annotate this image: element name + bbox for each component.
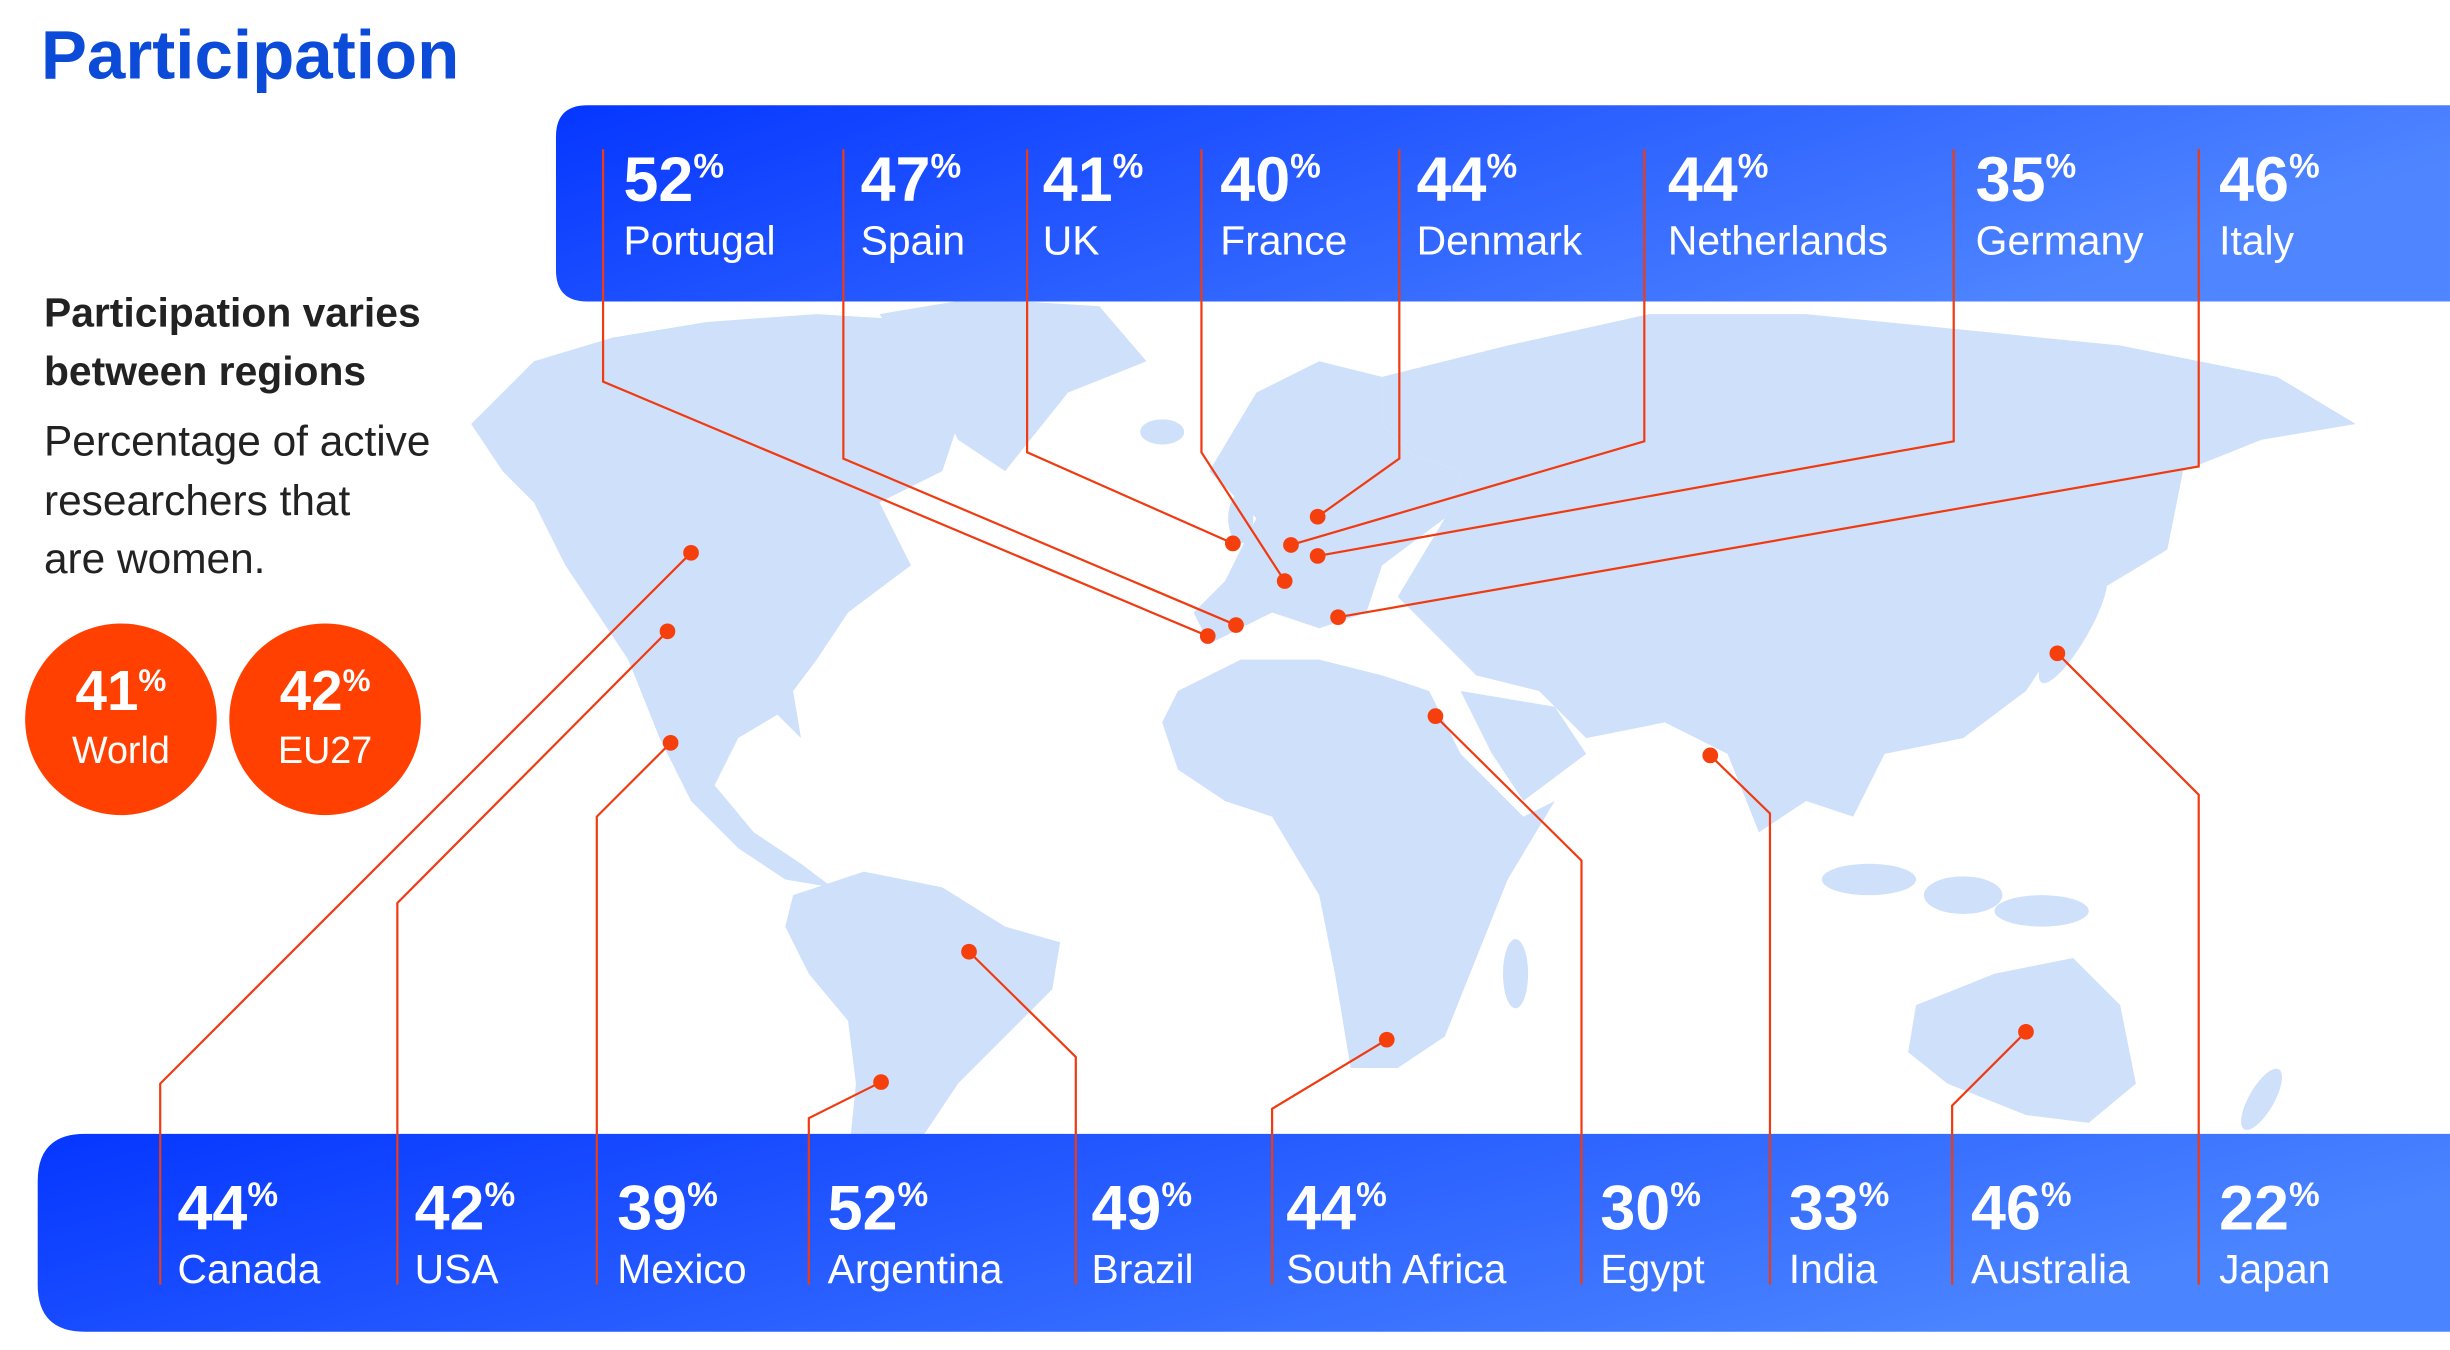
circle: World xyxy=(25,623,217,815)
top bar panel: Denmark xyxy=(1417,217,1583,263)
circle: World: World xyxy=(72,729,170,771)
bottom bar panel: India xyxy=(1789,1246,1878,1292)
bottom bar panel: 42 xyxy=(415,1174,484,1244)
top bar panel: Portugal xyxy=(623,217,776,263)
top bar panel: % xyxy=(1486,147,1517,185)
bottom bar panel: Brazil xyxy=(1092,1246,1194,1292)
top bar panel: 52 xyxy=(623,145,693,215)
bottom bar panel: 44 xyxy=(1286,1174,1356,1244)
circle: EU27: % xyxy=(343,663,371,698)
bottom bar panel: % xyxy=(1670,1176,1701,1214)
title: Participation xyxy=(41,16,459,94)
circle: EU27 xyxy=(229,623,421,815)
bottom bar panel: % xyxy=(1356,1176,1387,1214)
subtitle text block: are women. xyxy=(44,535,265,582)
bottom bar panel: Mexico xyxy=(617,1246,747,1292)
bottom bar panel: % xyxy=(2289,1176,2320,1214)
circle: EU27: 42 xyxy=(280,659,343,722)
bottom bar panel: % xyxy=(247,1176,278,1214)
top bar panel: UK xyxy=(1043,217,1100,263)
top bar panel: Spain xyxy=(861,217,965,263)
bottom bar panel: 46 xyxy=(1971,1174,2041,1244)
bottom bar panel: 49 xyxy=(1092,1174,1161,1244)
bottom bar panel: % xyxy=(484,1176,515,1214)
top bar panel xyxy=(556,105,2450,302)
bottom bar panel: Japan xyxy=(2219,1246,2330,1292)
top bar panel: 47 xyxy=(861,145,931,215)
subtitle text block xyxy=(44,290,430,582)
top bar panel: Germany xyxy=(1976,217,2144,263)
bottom bar panel: % xyxy=(1859,1176,1889,1214)
subtitle text block: Percentage of active xyxy=(44,417,430,464)
circle: EU27: EU27 xyxy=(278,729,372,771)
top bar panel: % xyxy=(931,147,961,185)
bottom bar panel: Egypt xyxy=(1600,1246,1705,1292)
bottom bar panel xyxy=(38,1134,2450,1332)
top bar panel: 46 xyxy=(2219,145,2289,215)
bottom bar panel: USA xyxy=(415,1246,499,1292)
top bar panel: % xyxy=(693,147,724,185)
bottom bar panel: Australia xyxy=(1971,1246,2130,1292)
circle: World: 41 xyxy=(76,659,138,722)
bottom bar panel: Argentina xyxy=(828,1246,1003,1292)
top bar panel: 41 xyxy=(1043,145,1113,215)
top bar panel: France xyxy=(1220,217,1347,263)
bottom bar panel: 33 xyxy=(1789,1174,1859,1244)
bottom bar panel: % xyxy=(898,1176,928,1214)
subtitle text block: researchers that xyxy=(44,477,351,524)
top bar panel: % xyxy=(1738,147,1768,185)
subtitle text block: between regions xyxy=(44,348,366,394)
top bar panel: 44 xyxy=(1668,145,1738,215)
bottom bar panel: % xyxy=(1161,1176,1192,1214)
world map xyxy=(471,298,2356,1225)
bottom bar panel: % xyxy=(2041,1176,2072,1214)
bottom bar panel: 22 xyxy=(2219,1174,2289,1244)
bottom bar panel: 39 xyxy=(617,1174,687,1244)
bottom bar panel: 52 xyxy=(828,1174,898,1244)
leader lines and dots xyxy=(160,149,2199,1285)
top bar panel: Italy xyxy=(2219,217,2295,263)
top bar panel: 44 xyxy=(1417,145,1486,215)
top bar panel: 40 xyxy=(1220,145,1290,215)
bottom bar panel: Canada xyxy=(177,1246,321,1292)
top bar panel: 35 xyxy=(1976,145,2046,215)
top bar panel: % xyxy=(1290,147,1321,185)
bottom bar panel: 30 xyxy=(1600,1174,1670,1244)
top bar panel: Netherlands xyxy=(1668,217,1888,263)
top bar panel: % xyxy=(2289,147,2320,185)
bottom bar panel: South Africa xyxy=(1286,1246,1507,1292)
circle: World: % xyxy=(138,663,166,698)
bottom bar panel: 44 xyxy=(177,1174,247,1244)
top bar panel: % xyxy=(2046,147,2076,185)
top bar panel: % xyxy=(1113,147,1143,185)
bottom bar panel: % xyxy=(687,1176,718,1214)
subtitle text block: Participation varies xyxy=(44,290,421,336)
